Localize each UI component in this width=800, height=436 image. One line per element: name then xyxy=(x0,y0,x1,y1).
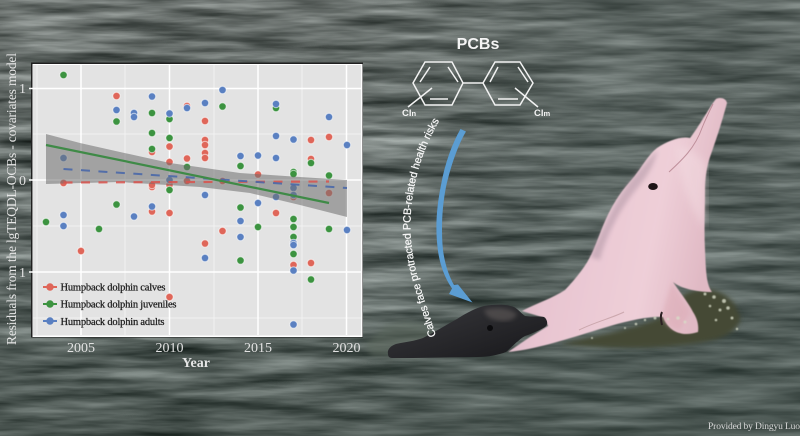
dolphin shading xyxy=(579,104,713,330)
water splash droplets xyxy=(591,292,738,339)
calf eye xyxy=(487,325,493,331)
calf dolphin xyxy=(388,305,547,358)
adults trend line xyxy=(64,169,347,188)
adults points xyxy=(60,86,351,328)
dolphin body xyxy=(508,98,727,352)
calves points xyxy=(60,92,333,301)
x axis title: Year xyxy=(182,356,210,371)
x axis ticks: 2015 xyxy=(244,341,272,356)
calves trend line xyxy=(64,182,329,183)
x axis ticks xyxy=(67,341,360,356)
y axis ticks: 1 xyxy=(19,266,26,281)
title: PCBs: PCBs xyxy=(457,36,499,53)
icon: PCB molecule: Cln xyxy=(402,108,416,119)
calf body xyxy=(388,305,547,358)
juveniles trend line xyxy=(46,145,329,203)
credit: Provided by Dingyu Luo xyxy=(708,422,800,432)
x axis ticks: 2010 xyxy=(156,341,184,356)
dolphin splash water xyxy=(364,289,740,358)
icon: PCB molecule xyxy=(402,62,550,119)
calf highlight xyxy=(484,308,517,321)
juveniles points xyxy=(42,71,333,283)
x axis ticks: 2020 xyxy=(332,341,360,356)
y axis title: Residuals from the lgTEQDL-OCBs - covariates model xyxy=(4,53,19,345)
dolphin eye xyxy=(648,183,658,190)
y axis ticks: 1 xyxy=(19,82,26,97)
legend: calves: Humpback dolphin calves xyxy=(60,282,166,294)
y axis ticks xyxy=(19,82,26,281)
chart panel xyxy=(29,62,363,338)
y axis ticks: 0 xyxy=(19,174,26,189)
chart: residuals scatter plot xyxy=(4,53,363,371)
icon: PCB molecule: Clm xyxy=(534,108,550,119)
confidence band xyxy=(46,134,347,217)
legend: adults: Humpback dolphin adults xyxy=(60,317,164,328)
curved caption: Calves face protracted PCB-related health risks xyxy=(402,118,439,337)
legend xyxy=(43,282,176,328)
legend: juveniles: Humpback dolphin juveniles xyxy=(60,300,176,310)
x axis ticks: 2005 xyxy=(67,341,95,356)
adult dolphin xyxy=(508,98,738,352)
arrow: curved blue xyxy=(436,129,472,302)
